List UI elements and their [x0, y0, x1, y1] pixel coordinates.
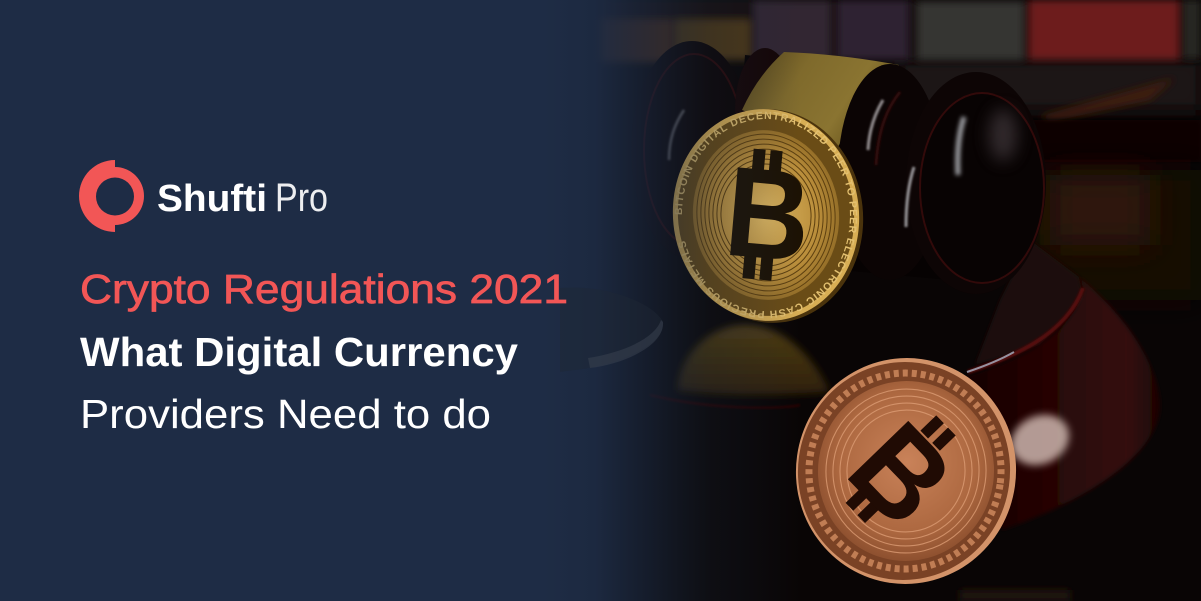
logo: Shufti Pro: [79, 160, 328, 232]
gavel handle: [1030, 120, 1201, 162]
title: line 2: What Digital Currency: [80, 329, 518, 375]
middle collar: [838, 64, 942, 280]
logo wordmark: Shufti: [157, 178, 267, 220]
lower table glow: [1030, 170, 1201, 300]
block top surface: [975, 240, 1084, 365]
gavel head: [631, 41, 1046, 294]
title: line 1: Crypto Regulations 2021: [80, 266, 568, 312]
gavel body: [730, 55, 950, 280]
highlight on block: [1003, 406, 1077, 474]
bitcoin symbol: B: [824, 397, 979, 551]
icon: gold bitcoin coin: BITCOIN DIGITAL DECENTRALIZED PEER TO PEER ELECTRONIC CASH PRECIOUS METALS: [674, 112, 858, 318]
navy gradient overlay: [0, 0, 800, 601]
table surface: [900, 60, 1201, 110]
gavel block: [650, 240, 1160, 530]
title: line 3: Providers Need to do: [80, 391, 491, 437]
photo background: [440, 0, 1201, 601]
silver coin: [560, 288, 663, 372]
logo wordmark light: Pro: [275, 176, 328, 220]
blurred book shelf: [600, 0, 1201, 62]
brass band: [742, 52, 899, 147]
wood grain glint: [960, 590, 1070, 601]
left cap: [631, 41, 753, 259]
icon: logo ring: [79, 160, 144, 232]
main cap: [906, 72, 1046, 294]
gold coin reflection: [677, 325, 830, 395]
bitcoin symbol: B: [720, 140, 816, 290]
icon: copper bitcoin coin: [781, 344, 1031, 598]
